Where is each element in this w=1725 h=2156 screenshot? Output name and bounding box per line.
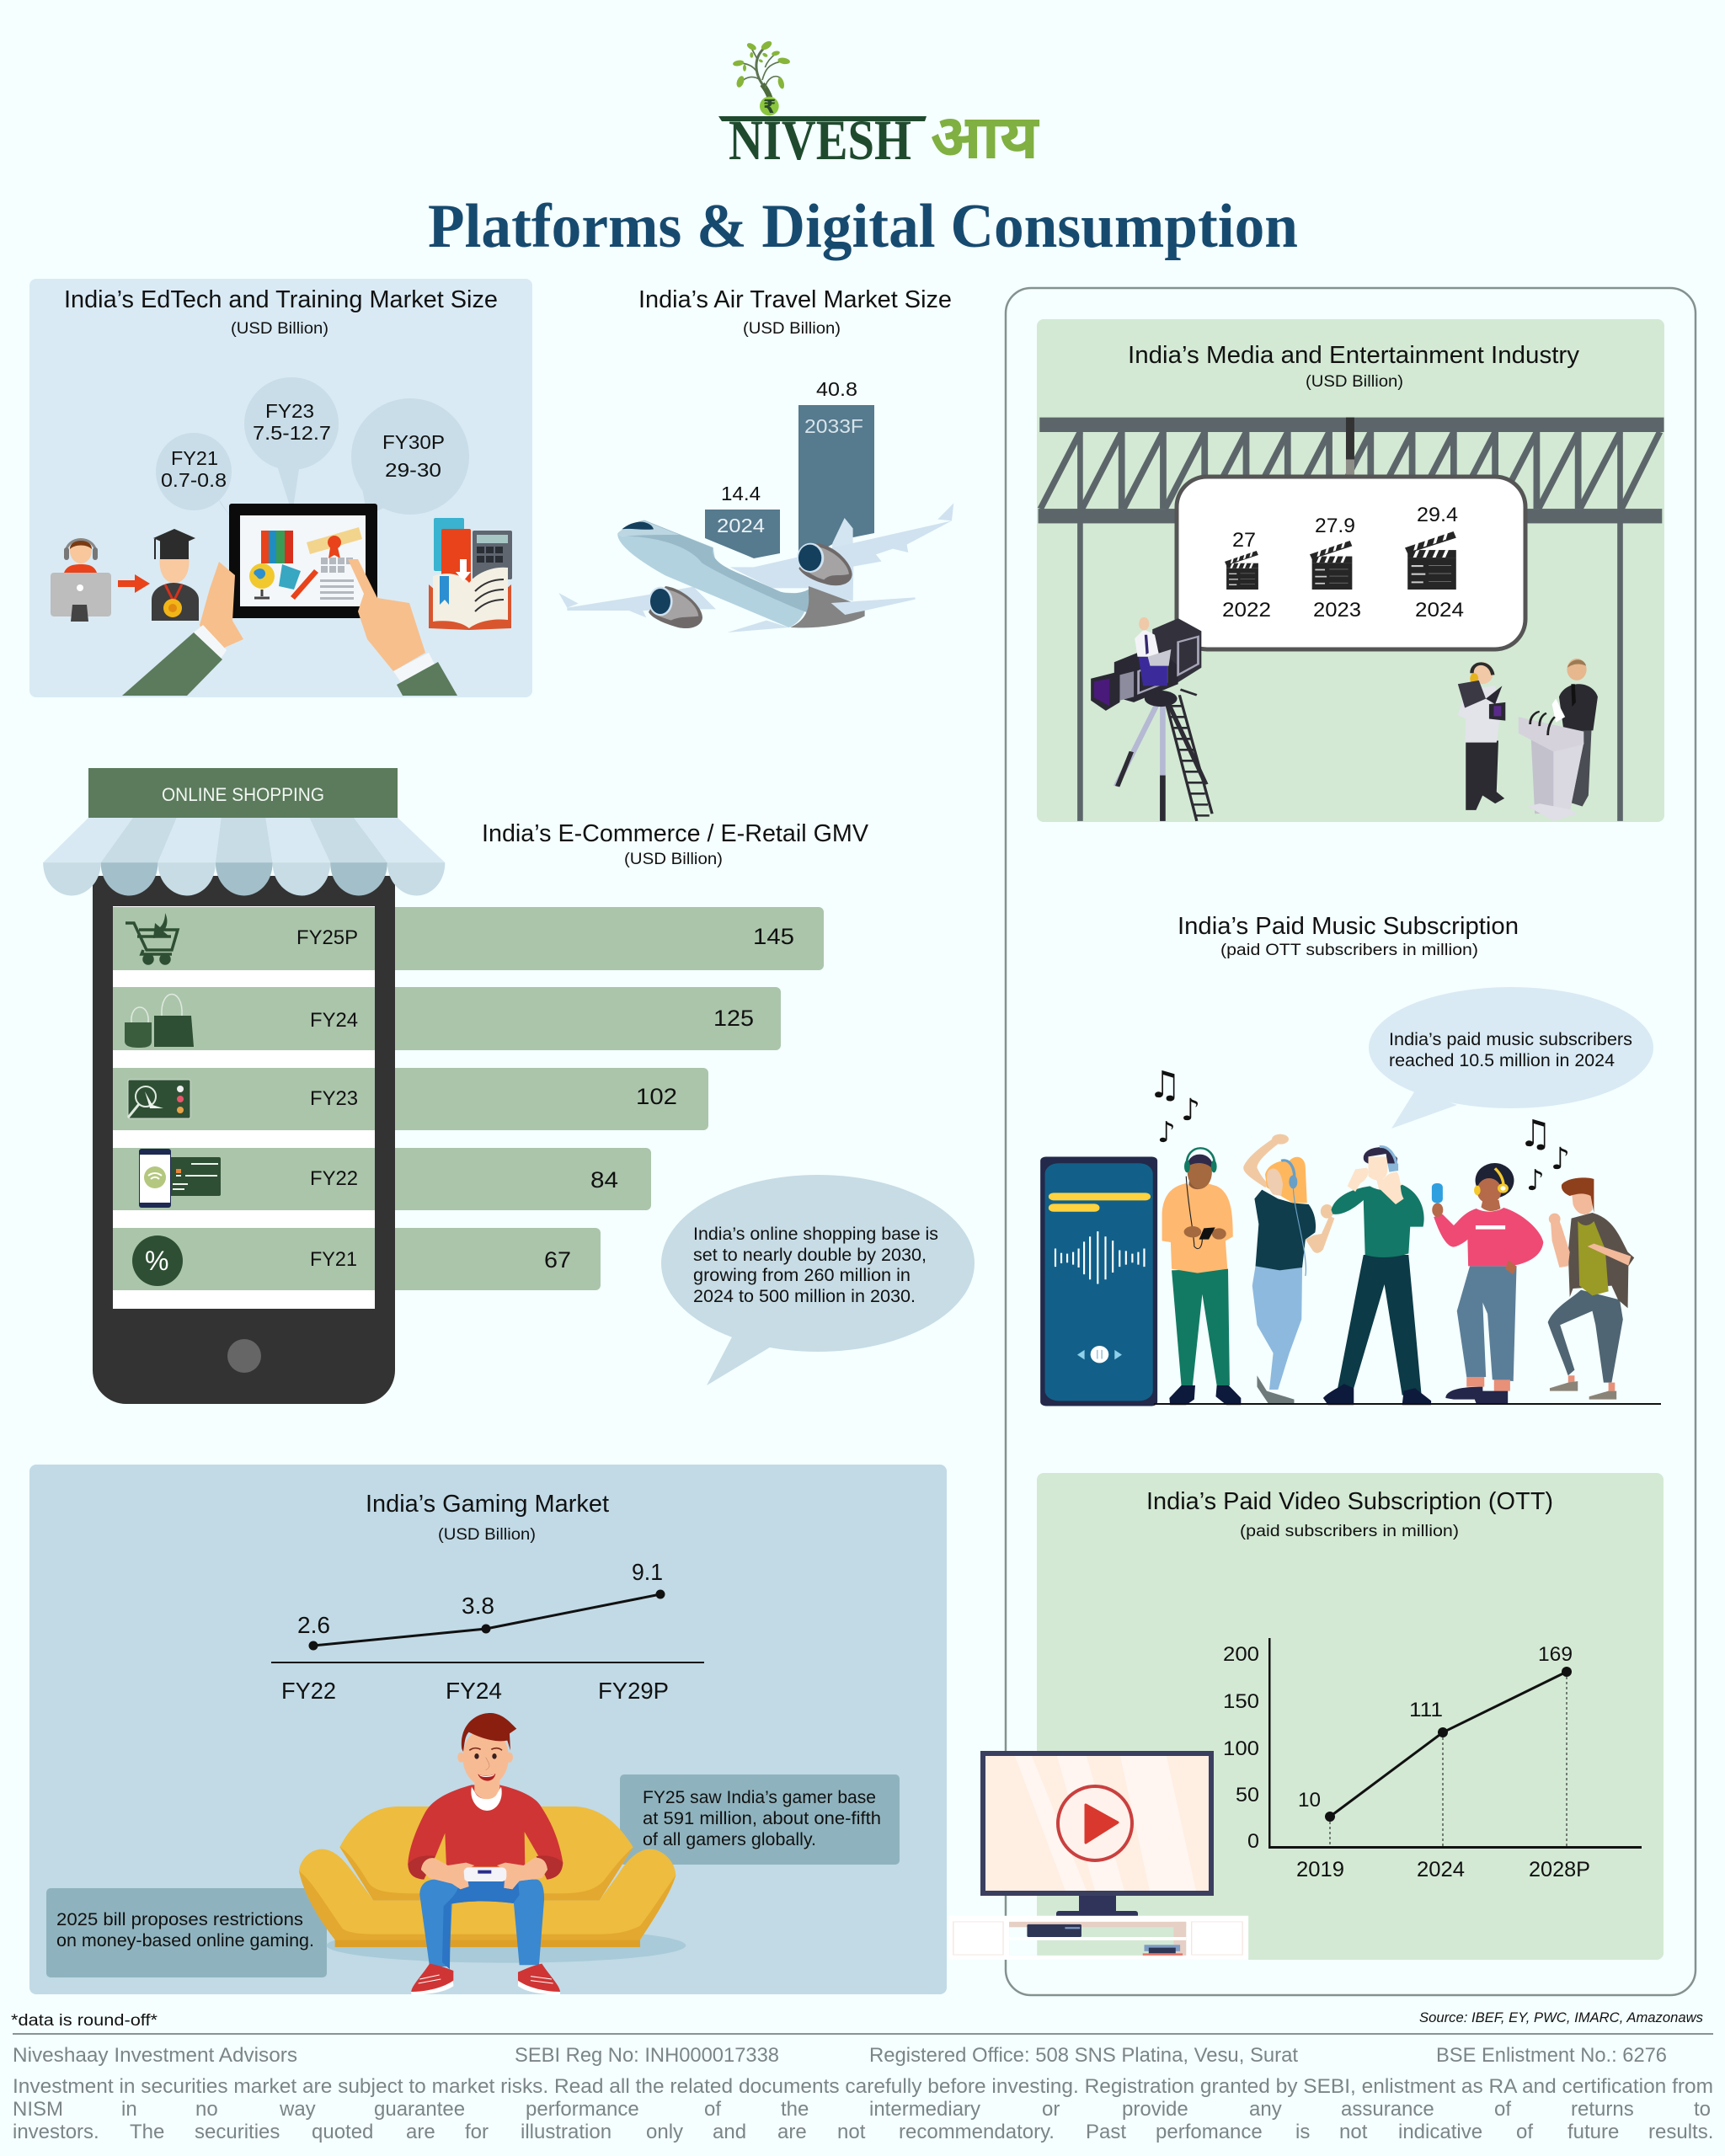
icon: notes right: ♫ bbox=[1519, 1113, 1551, 1155]
panel: gaming market bbox=[29, 1465, 947, 1994]
bar labels: FY24 bbox=[310, 1009, 358, 1032]
callout: music subscribers: reached 10.5 million in 2024 bbox=[1389, 1051, 1615, 1070]
heading: air travel: India’s Air Travel Market Size bbox=[638, 286, 952, 313]
footer: disclaimer: securities bbox=[195, 2121, 280, 2143]
footer: disclaimer: perfomance bbox=[1156, 2121, 1263, 2143]
bubble: FY30P: FY30P bbox=[382, 431, 445, 453]
line chart: gaming market: 9.1 bbox=[632, 1559, 663, 1585]
awning bbox=[43, 818, 445, 895]
sign: online shopping: ONLINE SHOPPING bbox=[162, 784, 324, 805]
icon: phone body bbox=[93, 876, 395, 1404]
footer: disclaimer: recommendatory. bbox=[899, 2121, 1055, 2143]
callout: music subscribers: India’s paid music subscribers bbox=[1389, 1030, 1632, 1049]
chart: air travel bbox=[558, 286, 953, 632]
unit: gaming: (USD Billion) bbox=[438, 1526, 536, 1544]
callout: online gaming bill: 2025 bill proposes restrictions bbox=[56, 1910, 303, 1929]
line chart: OTT subscribers: 150 bbox=[1223, 1690, 1259, 1713]
footnote: rounding: *data is round-off* bbox=[11, 2012, 158, 2030]
footer: disclaimer: returns bbox=[1571, 2098, 1634, 2121]
clapper: 2024 bbox=[1405, 504, 1464, 622]
icon: gamer on sofa bbox=[299, 1713, 686, 1994]
bar: 2024: 2024 bbox=[717, 515, 765, 536]
bar values: 125 bbox=[713, 1006, 754, 1031]
clapper: 2022: 2022 bbox=[1222, 599, 1271, 622]
bar labels: FY25P bbox=[296, 926, 358, 949]
line chart: gaming market bbox=[271, 1559, 704, 1704]
callout: online shopping base bbox=[661, 1175, 975, 1385]
footer: disclaimer: future bbox=[1567, 2121, 1619, 2143]
icon: notes left: ♪ bbox=[1181, 1093, 1200, 1128]
heading: music: India’s Paid Music Subscription bbox=[1178, 913, 1519, 940]
bar values: 67 bbox=[544, 1247, 571, 1273]
heading: media: India’s Media and Entertainment Industry bbox=[1128, 342, 1580, 369]
icon: phone and card bbox=[139, 1149, 221, 1208]
person 3 bbox=[1323, 1147, 1431, 1405]
bar values: 102 bbox=[636, 1084, 677, 1109]
title: Platforms & Digital Consumption bbox=[428, 192, 1298, 261]
callout: online shopping base: growing from 260 million in bbox=[693, 1266, 911, 1285]
icon: graduate bbox=[152, 529, 199, 621]
icon: shopping bags bbox=[125, 994, 194, 1048]
footer: disclaimer: for bbox=[465, 2121, 489, 2143]
footer: disclaimer: in bbox=[121, 2098, 137, 2121]
line chart: OTT subscribers bbox=[1223, 1638, 1642, 1881]
clapper: 2023: 27.9 bbox=[1315, 515, 1355, 537]
footer: disclaimer: way bbox=[279, 2098, 316, 2121]
icon: notes right bbox=[1519, 1113, 1570, 1198]
clapper: 2024: 2024 bbox=[1415, 599, 1464, 622]
footer: disclaimer: performance bbox=[526, 2098, 639, 2121]
icon: film camera crew bbox=[1091, 617, 1212, 821]
icon: left hand and sleeve bbox=[122, 562, 243, 696]
panel: media and entertainment bbox=[1037, 319, 1664, 822]
logo: Nivesh: आय bbox=[930, 102, 1040, 172]
icon: notes left: ♪ bbox=[1157, 1116, 1176, 1150]
logo: Nivesh bbox=[718, 40, 1040, 172]
storefront phone: online shopping bbox=[43, 768, 975, 1404]
bar: 2033F: 2033F bbox=[804, 415, 863, 437]
logo: Nivesh: NIVESH bbox=[729, 108, 911, 172]
footer: disclaimer: of bbox=[1494, 2098, 1511, 2121]
bar labels: FY21 bbox=[310, 1248, 357, 1271]
footer: disclaimer bbox=[13, 2075, 1713, 2143]
footer: disclaimer: to bbox=[1694, 2098, 1711, 2121]
icon: percent badge bbox=[132, 1235, 183, 1286]
line chart: OTT subscribers: 200 bbox=[1223, 1643, 1259, 1666]
bar labels: FY23 bbox=[310, 1087, 358, 1110]
bubble: FY30P bbox=[351, 398, 469, 515]
unit: music: (paid OTT subscribers in million) bbox=[1220, 942, 1478, 959]
bubble: FY21 bbox=[156, 433, 232, 517]
footer: disclaimer: the bbox=[781, 2098, 809, 2121]
icon: books and calculator bbox=[429, 518, 512, 630]
person 2 bbox=[1243, 1134, 1334, 1404]
line chart: OTT subscribers: 2028P bbox=[1529, 1858, 1590, 1881]
footer: disclaimer: guarantee bbox=[374, 2098, 465, 2121]
bubble: FY23 bbox=[244, 377, 339, 514]
callout: gamer base: of all gamers globally. bbox=[643, 1830, 816, 1849]
bars beyond phone bbox=[371, 907, 824, 1290]
icon: right hand and sleeve bbox=[348, 559, 457, 696]
footer: disclaimer: not bbox=[837, 2121, 866, 2143]
footer: disclaimer: no bbox=[195, 2098, 218, 2121]
bar: 2033F: 40.8 bbox=[816, 378, 857, 400]
unit: air travel: (USD Billion) bbox=[743, 320, 841, 338]
line chart: OTT subscribers: 2024 bbox=[1417, 1858, 1465, 1881]
clapper: 2024: 29.4 bbox=[1417, 504, 1458, 526]
footer: disclaimer: are bbox=[777, 2121, 807, 2143]
callout: gamer base: FY25 saw India’s gamer base bbox=[643, 1788, 876, 1807]
icon: tablet with study items bbox=[229, 504, 377, 618]
clapper: 2023 bbox=[1310, 515, 1361, 622]
bubble: FY23: 7.5-12.7 bbox=[253, 422, 331, 444]
unit: e-commerce: (USD Billion) bbox=[624, 851, 723, 868]
footer: disclaimer: The bbox=[130, 2121, 164, 2143]
icon: group listening to music bbox=[1162, 1134, 1634, 1405]
footer: company details: Registered Office: 508 SNS Platina, Vesu, Surat bbox=[869, 2044, 1298, 2067]
bar values: 145 bbox=[753, 924, 794, 949]
icon: music player phone bbox=[1040, 1156, 1157, 1406]
bar labels bbox=[296, 926, 358, 1271]
line chart: OTT subscribers: 2019 bbox=[1296, 1858, 1344, 1881]
footer: disclaimer: indicative bbox=[1398, 2121, 1482, 2143]
sign: online shopping bbox=[88, 768, 398, 818]
bubble: FY21: 0.7-0.8 bbox=[161, 469, 227, 491]
person 4 bbox=[1432, 1163, 1543, 1404]
icon: notes left bbox=[1148, 1064, 1200, 1150]
bar: 2033F bbox=[798, 378, 874, 564]
footer: company details: BSE Enlistment No.: 6276 bbox=[1436, 2044, 1667, 2067]
icon: lighting truss bbox=[1039, 418, 1664, 821]
arrow: learner to graduate bbox=[118, 574, 150, 593]
heading: video: India’s Paid Video Subscription (OTT) bbox=[1146, 1488, 1553, 1515]
ground line bbox=[1154, 1403, 1661, 1405]
callout: music subscribers bbox=[1369, 987, 1653, 1129]
callout: gamer base bbox=[620, 1774, 900, 1865]
callout: online shopping base: 2024 to 500 million in 2030. bbox=[693, 1287, 916, 1306]
line chart: gaming market: FY22 bbox=[281, 1678, 336, 1704]
icon: notes left: ♫ bbox=[1148, 1064, 1181, 1107]
bars inside phone screen bbox=[113, 907, 375, 1290]
panel: right column frame bbox=[1006, 288, 1696, 1995]
footer: disclaimer: is bbox=[1295, 2121, 1310, 2143]
callout: gamer base: at 591 million, about one-fifth bbox=[643, 1809, 881, 1828]
clapper: 2022 bbox=[1222, 529, 1271, 622]
line chart: OTT subscribers: 10 bbox=[1298, 1789, 1321, 1812]
bar values bbox=[544, 924, 794, 1273]
panel: EdTech market bbox=[29, 279, 532, 697]
footer: disclaimer: intermediary bbox=[869, 2098, 980, 2121]
unit: media: (USD Billion) bbox=[1306, 373, 1403, 391]
callout: online shopping base: set to nearly double by 2030, bbox=[693, 1246, 927, 1265]
heading: e-commerce: India’s E-Commerce / E-Retail GMV bbox=[482, 820, 869, 847]
footer: disclaimer: not bbox=[1339, 2121, 1368, 2143]
footer: disclaimer: or bbox=[1042, 2098, 1060, 2121]
bubble: FY21: FY21 bbox=[171, 447, 218, 469]
panel: paid video subscription bbox=[1037, 1473, 1664, 1960]
person 1 bbox=[1162, 1148, 1241, 1405]
line chart: OTT subscribers: 111 bbox=[1409, 1699, 1443, 1721]
footer: disclaimer: only bbox=[646, 2121, 683, 2143]
bar labels: FY22 bbox=[310, 1167, 358, 1190]
line chart: gaming market: FY24 bbox=[446, 1678, 502, 1704]
screen with yearly values bbox=[1177, 477, 1525, 649]
line chart: OTT subscribers: 169 bbox=[1538, 1643, 1573, 1666]
footer: company details bbox=[13, 2044, 1667, 2067]
panel: paid music subscription bbox=[1040, 913, 1661, 1406]
person 5 bbox=[1548, 1177, 1634, 1400]
clapper: 2022: 27 bbox=[1232, 529, 1256, 552]
line chart: gaming market: FY29P bbox=[598, 1678, 669, 1704]
icon: cameraman and speaker at podium bbox=[1458, 659, 1598, 821]
clapper: 2023: 2023 bbox=[1313, 599, 1361, 622]
bar: 2024: 14.4 bbox=[721, 483, 761, 504]
heading: gaming: India’s Gaming Market bbox=[366, 1491, 609, 1518]
source note: Source: IBEF, EY, PWC, IMARC, Amazonaws bbox=[1419, 2009, 1703, 2025]
footer: disclaimer: any bbox=[1249, 2098, 1282, 2121]
footer: disclaimer: of bbox=[1516, 2121, 1533, 2143]
footer: disclaimer: quoted bbox=[312, 2121, 373, 2143]
footer: disclaimer: investors. bbox=[13, 2121, 99, 2143]
footer: disclaimer: illustration bbox=[521, 2121, 611, 2143]
unit: video: (paid subscribers in million) bbox=[1240, 1523, 1459, 1540]
footer: disclaimer: Past bbox=[1086, 2121, 1126, 2143]
line chart: gaming market: 3.8 bbox=[462, 1593, 494, 1619]
footer: disclaimer: results. bbox=[1648, 2121, 1713, 2143]
callout: online shopping base: India’s online shopping base is bbox=[693, 1225, 938, 1244]
footer: disclaimer: are bbox=[406, 2121, 435, 2143]
line chart: gaming market: 2.6 bbox=[297, 1612, 330, 1638]
icon: online store screen bbox=[128, 1080, 190, 1118]
line chart: OTT subscribers: 0 bbox=[1247, 1830, 1259, 1853]
callout: online gaming bill: on money-based online gaming. bbox=[56, 1931, 314, 1951]
bar: 2024 bbox=[705, 483, 780, 558]
icon: notes right: ♪ bbox=[1551, 1142, 1570, 1177]
icon: TV cabinet bbox=[948, 1916, 1248, 1960]
footer: disclaimer: of bbox=[704, 2098, 721, 2121]
line chart: OTT subscribers: 50 bbox=[1236, 1784, 1259, 1806]
footer: disclaimer: provide bbox=[1122, 2098, 1188, 2121]
icon: learner at computer bbox=[51, 538, 111, 622]
unit: EdTech: (USD Billion) bbox=[231, 320, 328, 338]
footer: company details: Niveshaay Investment Advisors bbox=[13, 2044, 297, 2067]
icon: percent badge: % bbox=[145, 1246, 168, 1276]
logo: Nivesh: ₹ bbox=[763, 97, 776, 118]
bubble: FY30P: 29-30 bbox=[385, 459, 441, 481]
footer: disclaimer: and bbox=[713, 2121, 746, 2143]
bubble: FY23: FY23 bbox=[265, 400, 314, 422]
footer: disclaimer: assurance bbox=[1341, 2098, 1434, 2121]
line chart: OTT subscribers: 100 bbox=[1223, 1737, 1259, 1760]
icon: airplane bbox=[558, 503, 953, 632]
icon: shopping cart bbox=[126, 913, 178, 963]
footer: company details: SEBI Reg No: INH000017338 bbox=[515, 2044, 779, 2067]
icon: television with play button bbox=[980, 1751, 1214, 1918]
callout: online gaming bill bbox=[46, 1888, 327, 1977]
icon: notes right: ♪ bbox=[1526, 1164, 1545, 1198]
heading: EdTech: India’s EdTech and Training Market Size bbox=[64, 286, 498, 313]
footer: disclaimer: Investment in securities market are subject to market risks. Read all the related documents carefully before investing. Registration granted by SEBI, enlistment as RA and certification from bbox=[13, 2075, 1713, 2098]
footer: disclaimer: NISM bbox=[13, 2098, 63, 2121]
bar values: 84 bbox=[590, 1167, 618, 1193]
